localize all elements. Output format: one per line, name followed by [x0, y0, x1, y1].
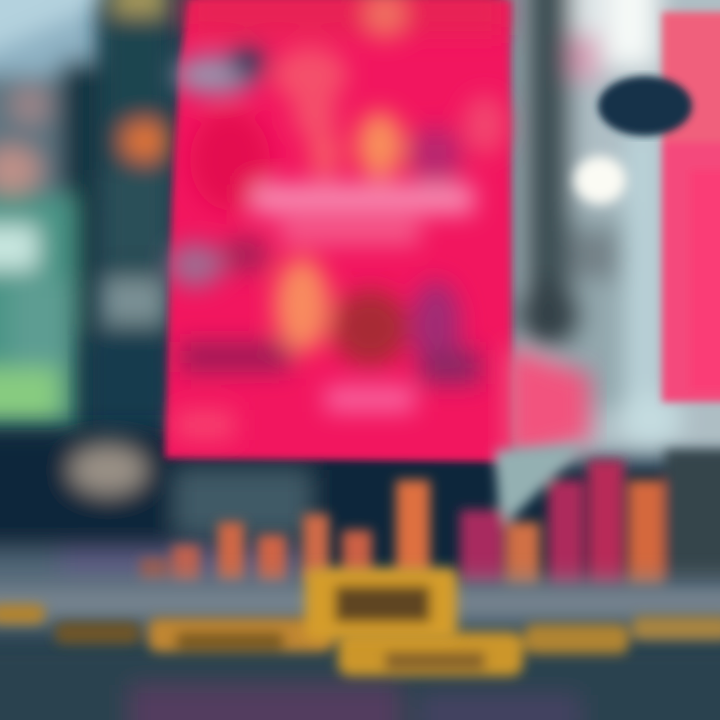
white light and dark lamp: [574, 76, 692, 204]
dark street band: [0, 430, 720, 590]
right pink billboard: [662, 12, 720, 402]
central gold coin block: [305, 568, 457, 640]
bar chart: orange bars: [140, 480, 430, 583]
main pink billboard: [165, 0, 512, 462]
billboard details: [167, 0, 507, 440]
coin stacks: [0, 604, 720, 676]
dark tower column: [85, 0, 172, 440]
road: [0, 580, 720, 720]
left buildings: [0, 0, 110, 440]
pink side awning: [505, 345, 590, 462]
bar chart: pink and orange bars: [460, 445, 720, 588]
right street columns: [505, 0, 720, 460]
